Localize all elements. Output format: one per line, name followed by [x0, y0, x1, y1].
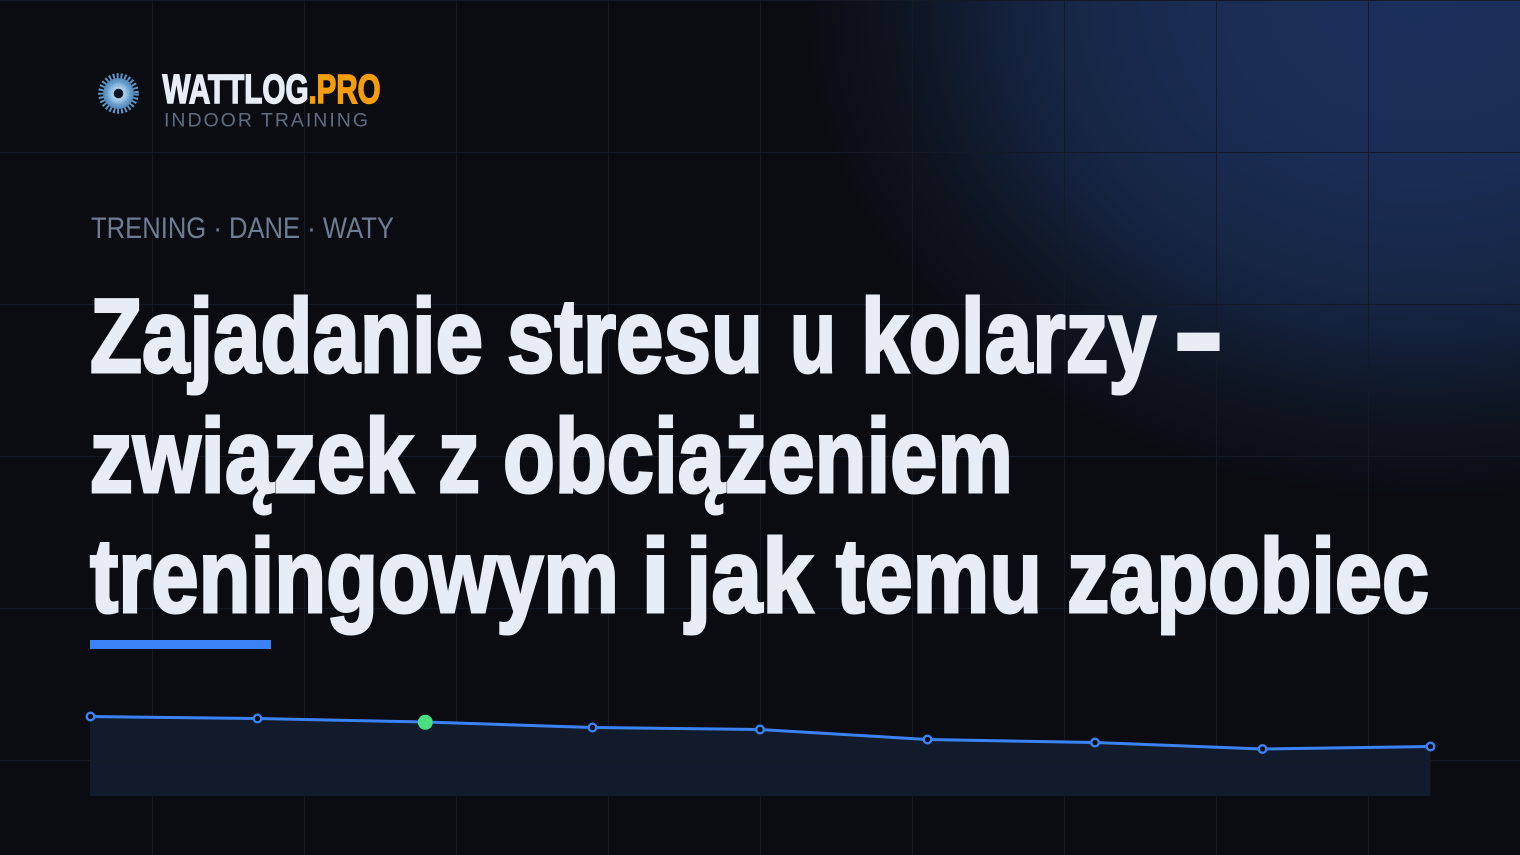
- title line 3: [90, 518, 1429, 635]
- title line 3: zapobiec: [1067, 518, 1429, 635]
- title line 3: i: [641, 518, 670, 635]
- brand name: WATTLOG.PRO: [162, 66, 380, 112]
- chart area fill: [90, 716, 1430, 796]
- title line 1: u: [790, 278, 836, 395]
- title line 3: temu: [836, 518, 1042, 635]
- title line 2: obciążeniem: [503, 398, 1013, 515]
- title line 1: stresu: [507, 278, 763, 395]
- title line 2: [90, 398, 1013, 515]
- title line 2: związek: [90, 398, 414, 515]
- highlighted marker: [418, 715, 433, 730]
- title: [90, 276, 1429, 635]
- title line 1: Zajadanie: [90, 278, 483, 395]
- line chart: [87, 713, 1434, 753]
- title line 1: kolarzy: [861, 278, 1156, 395]
- chart markers: [87, 713, 1434, 753]
- eyebrow text: TRENING · DANE · WATY: [91, 212, 394, 245]
- title line 3: jak: [684, 518, 814, 635]
- title line 3: treningowym: [90, 518, 619, 635]
- title line 1: [90, 276, 1219, 395]
- accent underline: [90, 640, 271, 649]
- background glow: [760, 0, 1520, 520]
- title line 2: z: [438, 398, 480, 515]
- chart line: [90, 716, 1430, 749]
- title line 1: –: [1178, 276, 1219, 393]
- logo: [101, 66, 380, 132]
- icon: cassette cog: [101, 76, 136, 111]
- brand subtitle: INDOOR TRAINING: [164, 110, 368, 132]
